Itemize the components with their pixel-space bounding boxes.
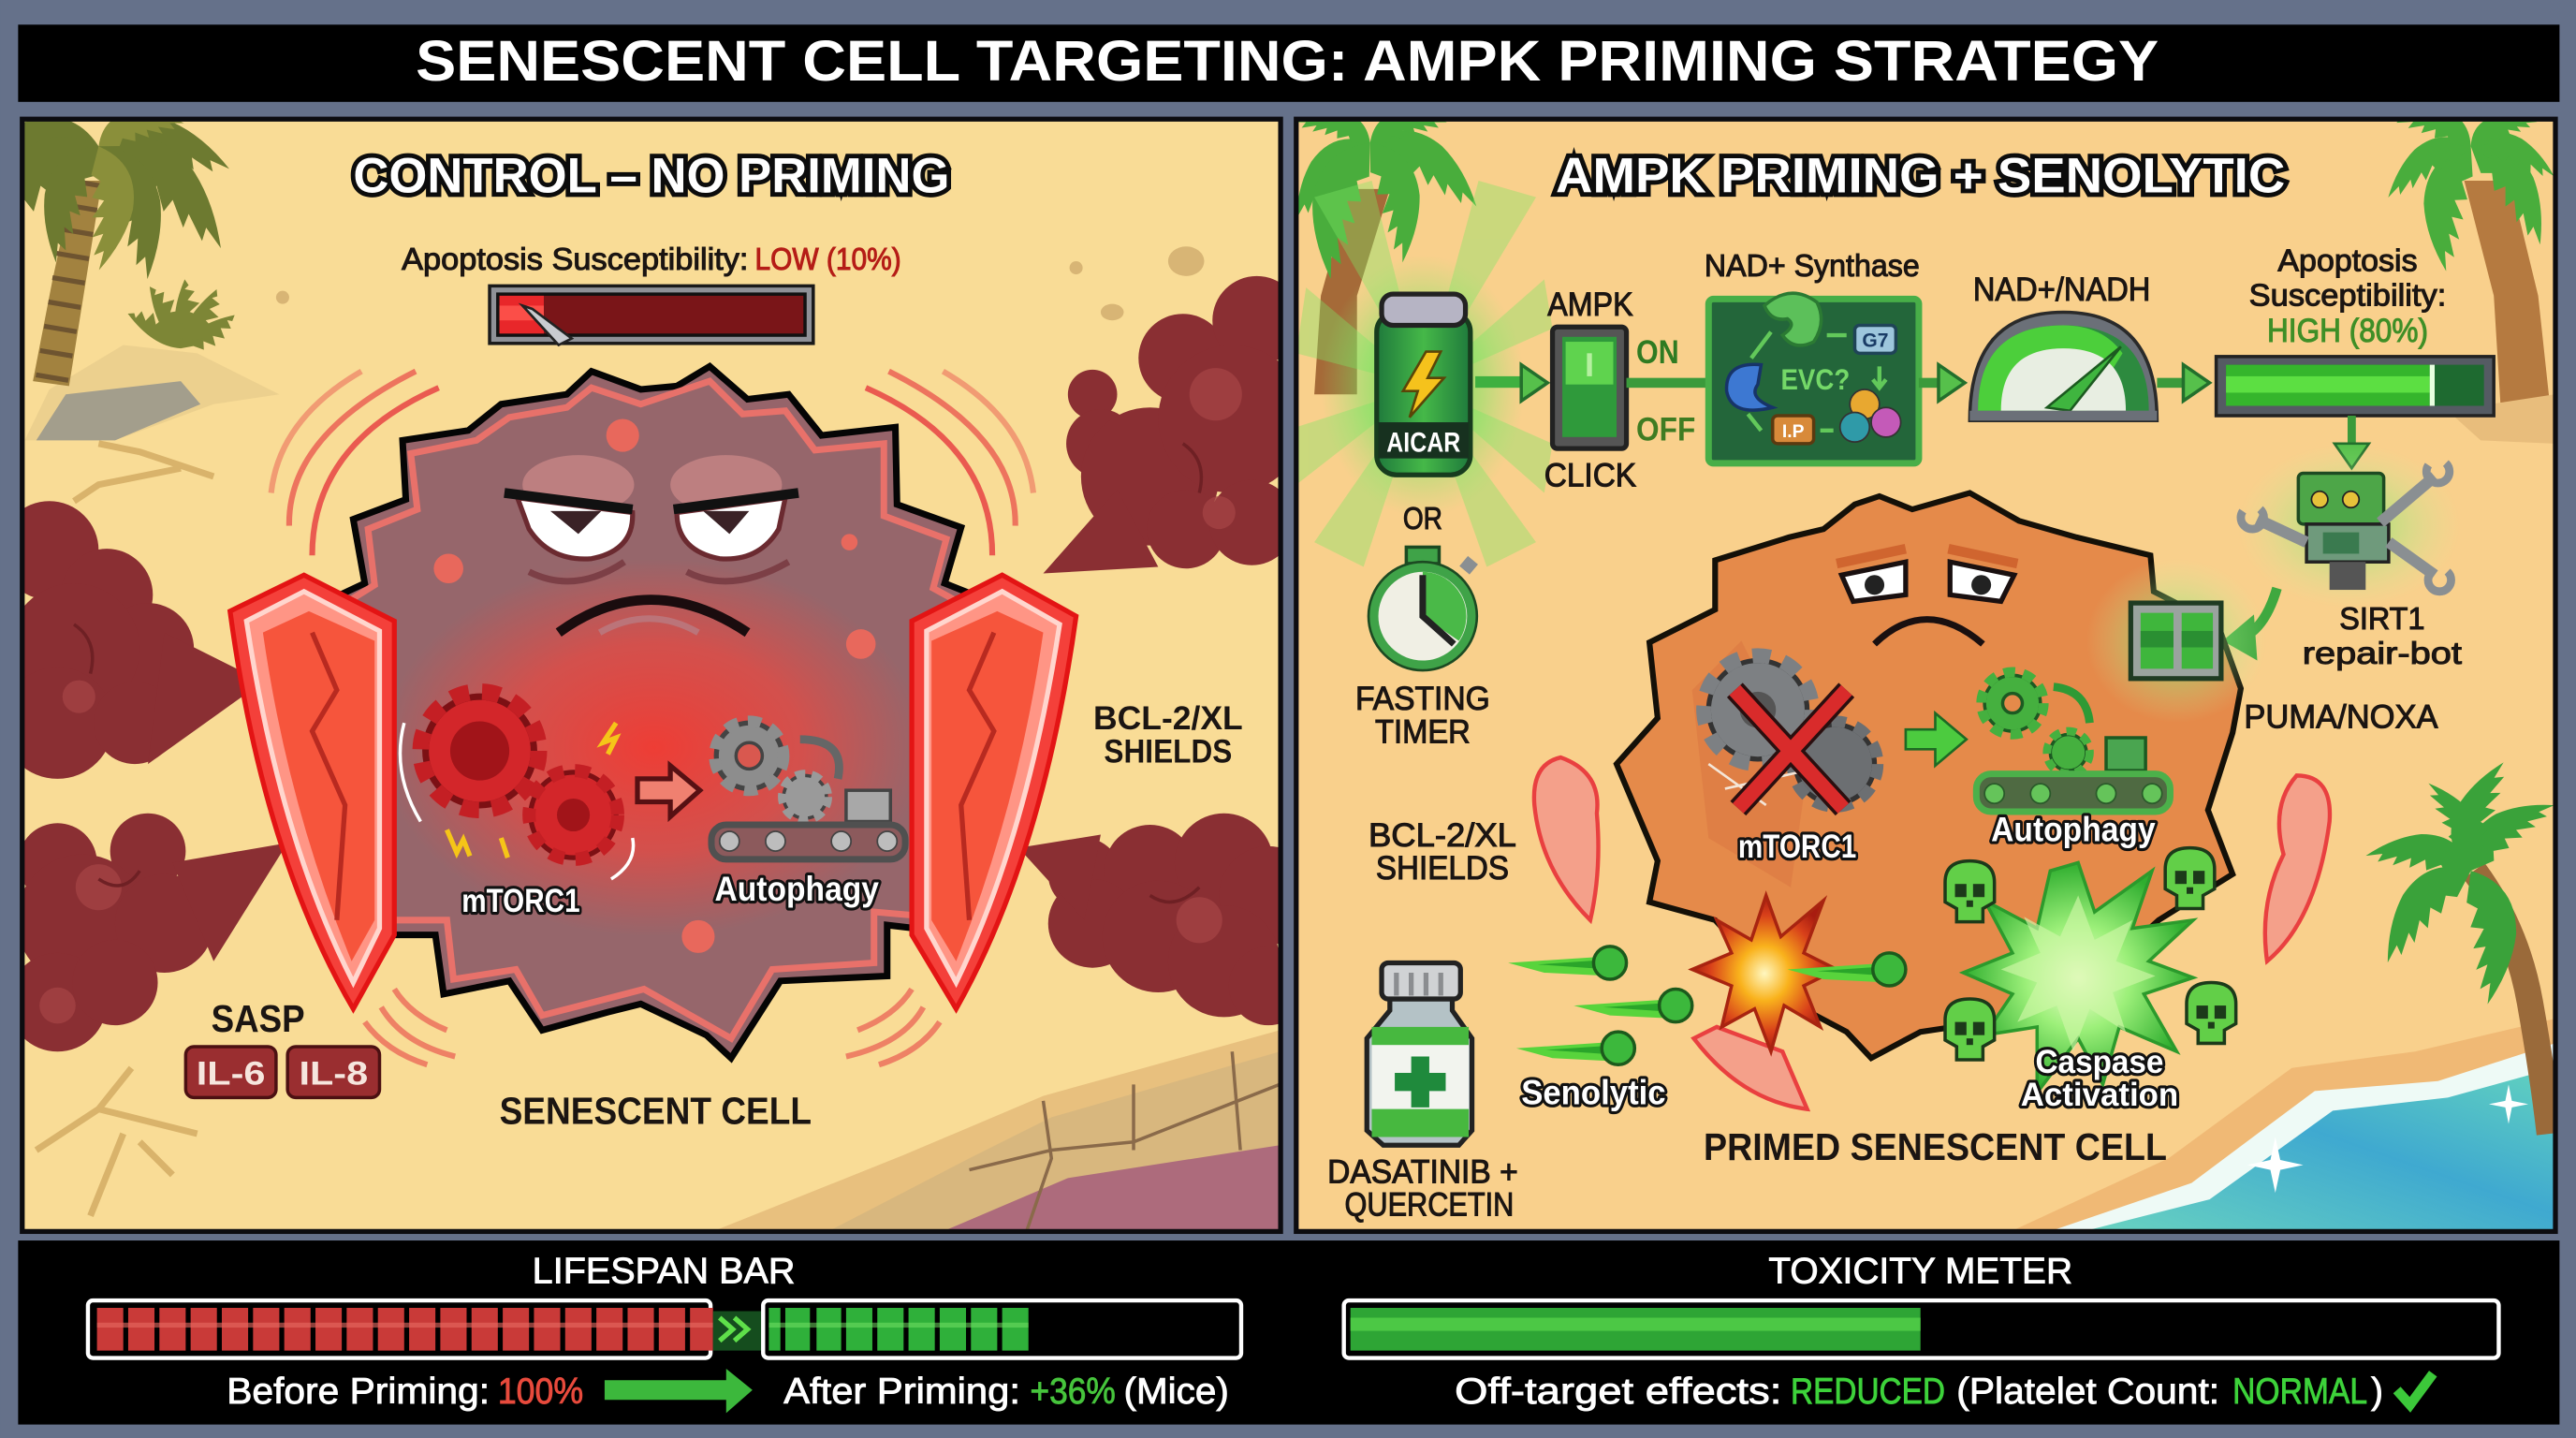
label: Autophagy primed: Autophagy xyxy=(1991,811,2156,849)
off-target text: (Platelet Count: xyxy=(1956,1372,2219,1412)
label: Caspase Activation: Activation xyxy=(2021,1077,2178,1113)
CLICK label: CLICK xyxy=(1544,457,1637,493)
mTORC1 gears xyxy=(400,692,634,879)
label: Caspase Activation xyxy=(2021,1044,2178,1113)
label: dasatinib + quercetin: DASATINIB + xyxy=(1327,1154,1518,1191)
connector: switch to synthase xyxy=(1627,378,1708,388)
apoptosis high label: Susceptibility: xyxy=(2249,278,2446,313)
broken shield left xyxy=(1534,757,1599,920)
after priming text: +36% xyxy=(1030,1372,1116,1412)
sand patches and grey rock xyxy=(24,246,1204,440)
IL-8 tag: IL-8 xyxy=(299,1055,368,1092)
panel: bottom status bars xyxy=(18,1240,2559,1425)
fasting timer label: FASTING xyxy=(1355,681,1490,717)
AICAR can xyxy=(1377,294,1471,475)
grumpy face xyxy=(505,455,798,633)
arrow: synthase to gauge xyxy=(1919,365,1965,401)
label: mTORC1 primed: mTORC1 xyxy=(1738,829,1856,865)
arrow: gauge to bar xyxy=(2157,365,2210,401)
panel: control no priming xyxy=(0,90,1318,1234)
label: BCL-2/XL shields right panel: BCL-2/XL xyxy=(1368,817,1516,854)
after priming text: (Mice) xyxy=(1123,1372,1229,1412)
label: primed senescent cell: PRIMED SENESCENT CELL xyxy=(1704,1125,2167,1168)
SASP smoke clouds xyxy=(0,276,1318,1051)
apoptosis label: Apoptosis Susceptibility: xyxy=(402,242,748,277)
apoptosis bar high xyxy=(2217,357,2494,416)
label: SASP: SASP xyxy=(212,997,305,1040)
SIRT1 repair-bot xyxy=(2237,444,2461,608)
senolytic bullets xyxy=(1508,946,1906,1064)
label: BCL-2/XL shields: SHIELDS xyxy=(1104,733,1232,770)
active autophagy machinery xyxy=(1976,672,2170,812)
apoptosis label xyxy=(401,247,900,277)
chevron connector xyxy=(713,1312,762,1351)
label: BCL-2/XL shields xyxy=(1095,706,1242,763)
small plant xyxy=(127,279,235,350)
label: BCL-2/XL shields right panel xyxy=(1368,817,1516,887)
label: Caspase Activation: Caspase xyxy=(2036,1044,2163,1080)
NAD+/NADH label: NAD+/NADH xyxy=(1973,271,2150,308)
NAD+ synthase box: G7 xyxy=(1862,330,1888,351)
NAD+ Synthase label: NAD+ Synthase xyxy=(1705,249,1920,284)
NAD+ synthase box: I.P xyxy=(1782,422,1805,442)
orange explosion xyxy=(1692,895,1837,1051)
arrow to autophagy xyxy=(637,766,700,816)
arrow to autophagy xyxy=(1906,713,1967,766)
panel: AMPK priming + senolytic xyxy=(1291,95,2558,1234)
autophagy machinery xyxy=(711,721,905,859)
check mark xyxy=(2397,1373,2433,1405)
fasting timer label xyxy=(1355,681,1490,750)
AMPK switch xyxy=(1553,327,1627,448)
label: SIRT1 repair-bot xyxy=(2303,602,2463,671)
before priming text xyxy=(227,1372,583,1412)
label: senescent cell: SENESCENT CELL xyxy=(500,1089,812,1132)
lifespan bar before xyxy=(88,1300,713,1358)
toxicity meter xyxy=(1344,1300,2498,1358)
label: Autophagy: Autophagy xyxy=(714,870,879,908)
arrow: bar to robot xyxy=(2334,416,2369,468)
label: SIRT1 repair-bot: SIRT1 xyxy=(2339,602,2424,637)
OR label: OR xyxy=(1403,502,1442,536)
PUMA/NOXA pore xyxy=(2086,559,2267,723)
arrowhead xyxy=(2223,614,2257,661)
panel borders xyxy=(22,119,2555,1231)
sea xyxy=(2012,1019,2554,1231)
ON label: ON xyxy=(1636,334,1679,371)
off-target text: Off-target effects: xyxy=(1455,1372,1781,1412)
NAD+ synthase box: EVC? xyxy=(1781,362,1850,396)
label: BCL-2/XL shields: BCL-2/XL xyxy=(1093,700,1243,737)
title bar xyxy=(18,24,2559,102)
palm tree left xyxy=(24,122,229,386)
red glow xyxy=(401,570,909,925)
off-target text: NORMAL xyxy=(2232,1372,2367,1412)
palm top left xyxy=(1298,122,1477,395)
panel heading: priming: AMPK PRIMING + SENOLYTIC xyxy=(1556,148,2285,203)
apoptosis high label xyxy=(2249,244,2446,349)
senolytic bottle xyxy=(1367,962,1472,1145)
toxicity meter heading: TOXICITY METER xyxy=(1768,1252,2072,1292)
off-target text: ) xyxy=(2371,1372,2383,1412)
before priming text: 100% xyxy=(498,1372,583,1412)
palm top right xyxy=(2387,95,2554,444)
BCL-2/XL shields xyxy=(230,575,1076,1009)
NAD gauge xyxy=(1969,312,2157,420)
apoptosis high label: HIGH (80%) xyxy=(2267,313,2428,349)
apoptosis high label: Apoptosis xyxy=(2277,244,2418,279)
palm bottom right xyxy=(2365,761,2557,1134)
cell spots xyxy=(433,419,875,953)
arrow: robot to pore xyxy=(2237,588,2277,639)
IL-8 tag xyxy=(287,1047,379,1097)
primed senescent cell xyxy=(1617,493,2241,1058)
NAD+ synthase box xyxy=(1708,293,1919,463)
green skulls xyxy=(1945,848,2236,1060)
IL-6 tag xyxy=(185,1047,276,1097)
energy drink glow xyxy=(1296,181,1553,566)
off-target text: REDUCED xyxy=(1791,1372,1945,1412)
OFF label: OFF xyxy=(1636,411,1695,448)
green caspase burst xyxy=(1963,862,2193,1093)
AMPK label: AMPK xyxy=(1547,286,1633,323)
label: BCL-2/XL shields right panel: SHIELDS xyxy=(1376,850,1509,887)
label: SIRT1 repair-bot: repair-bot xyxy=(2303,637,2463,671)
senescent cell body xyxy=(329,366,986,1058)
off-target text xyxy=(1455,1372,2383,1412)
after priming text xyxy=(783,1372,1229,1412)
green arrow xyxy=(605,1369,753,1413)
arrow: can to switch xyxy=(1475,365,1547,401)
label: mTORC1: mTORC1 xyxy=(461,883,580,919)
panel heading: control: CONTROL – NO PRIMING xyxy=(353,148,949,203)
before priming text: Before Priming: xyxy=(227,1372,490,1412)
lifespan bar heading: LIFESPAN BAR xyxy=(533,1252,795,1292)
worried face xyxy=(1837,549,2017,644)
vibration arcs xyxy=(271,372,1033,1064)
after priming text: After Priming: xyxy=(783,1372,1020,1412)
stopwatch xyxy=(1368,547,1478,670)
label: dasatinib + quercetin: QUERCETIN xyxy=(1345,1187,1514,1224)
broken shield right xyxy=(2265,775,2330,961)
fasting timer label: TIMER xyxy=(1375,713,1471,750)
broken shield bottom xyxy=(1693,1027,1808,1109)
lifespan bar after xyxy=(763,1300,1241,1358)
label: Senolytic: Senolytic xyxy=(1521,1073,1666,1111)
title text: SENESCENT CELL TARGETING: AMPK PRIMING STRATEGY xyxy=(416,29,2159,94)
inactive mTORC1 gears with X xyxy=(1704,655,1878,808)
beach corner xyxy=(714,1030,1280,1231)
apoptosis gauge low xyxy=(488,285,815,345)
apoptosis label: LOW (10%) xyxy=(754,242,901,277)
IL-6 tag: IL-6 xyxy=(197,1055,265,1092)
label: PUMA/NOXA: PUMA/NOXA xyxy=(2244,698,2438,735)
AICAR can: AICAR xyxy=(1386,428,1460,459)
cracks xyxy=(37,444,213,1216)
label: dasatinib + quercetin xyxy=(1327,1154,1518,1224)
